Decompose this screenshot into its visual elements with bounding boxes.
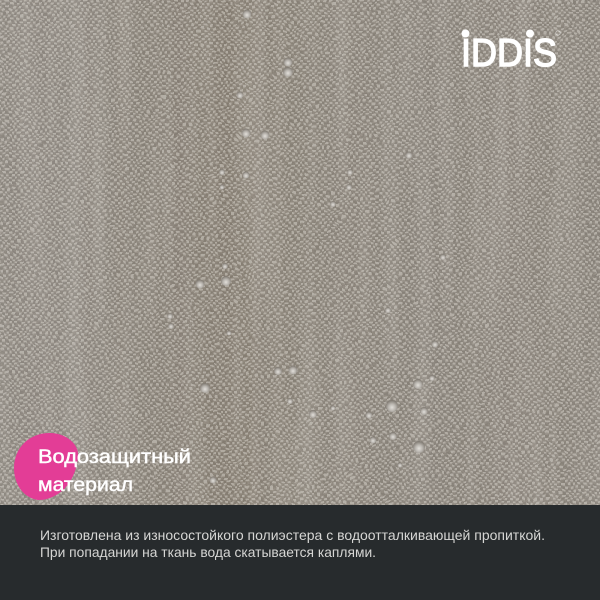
description text: При попадании на ткань вода скатывается каплями. [40, 544, 376, 560]
water droplets [167, 10, 446, 484]
heading: Водозащитный [38, 446, 191, 468]
description text [40, 527, 545, 560]
logo: IDDIS: IDDIS [461, 32, 557, 75]
heading: материал [38, 474, 133, 496]
heading [38, 446, 191, 496]
description text: Изготовлена из износостойкого полиэстера с водоотталкивающей пропиткой. [40, 527, 545, 543]
pink blob [14, 433, 78, 500]
